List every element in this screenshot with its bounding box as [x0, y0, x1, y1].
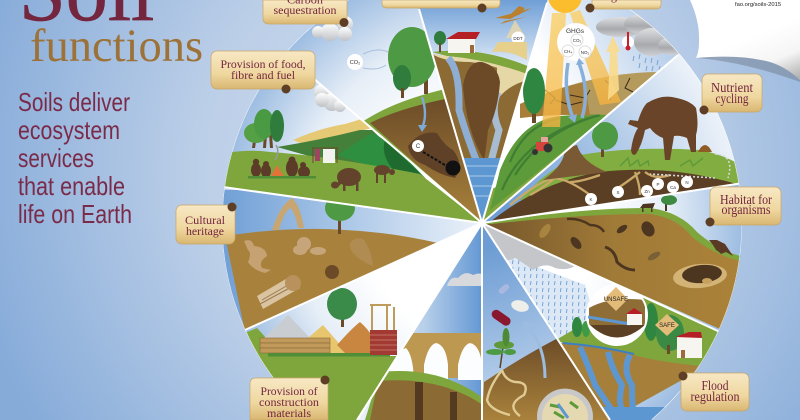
label: Provision of construction materials: Provision of: [260, 384, 318, 398]
label: Cultural heritage: heritage: [186, 224, 224, 238]
icon: upward arrow: [606, 36, 620, 100]
label: Nutrient cycling: cycling: [716, 92, 748, 107]
subtitle text: [18, 87, 132, 229]
aqueduct: [400, 333, 483, 378]
panel: climate regulation: [484, 0, 678, 220]
nutrient circles: N: [685, 180, 689, 185]
icon: exchange arrows: [566, 58, 585, 123]
icon: tree: [523, 68, 545, 123]
pillars: [415, 382, 457, 420]
subtitle text: life on Earth: [18, 199, 132, 229]
icon: CO2: [347, 50, 388, 70]
icon: arrow: [522, 321, 545, 378]
wheel dividers: [223, 3, 743, 420]
icon: pot: [325, 265, 339, 279]
icon: tree: [592, 122, 618, 157]
icon: thermometer: [622, 32, 634, 50]
label: Nutrient cycling: [700, 74, 762, 114]
panel: nutrient cycling: [480, 50, 750, 230]
icon: laundry: [312, 148, 338, 163]
cloud: [447, 273, 483, 286]
icon: grey gravel pile: [264, 315, 310, 338]
label: Climate regulation: [586, 0, 661, 12]
icon: clay pile: [337, 322, 379, 353]
nutrient circles: K: [589, 197, 593, 202]
icon: brick wall: [370, 305, 397, 355]
water veins: [448, 58, 477, 162]
rain: [505, 255, 600, 345]
rain cloud: [482, 223, 580, 270]
aqueduct arches: [390, 343, 482, 380]
label: Provision of food, fibre and fuel: [211, 51, 315, 94]
panel: carbon sequestration: [288, 0, 480, 220]
icon: arrow into soil: [418, 97, 427, 132]
icon: grey clouds: [596, 14, 686, 56]
nutrient circles: P: [656, 182, 660, 187]
green land: [556, 290, 725, 366]
icon: insects and worms: [537, 219, 662, 270]
soil: [370, 98, 482, 223]
panel: construction materials: [240, 220, 490, 420]
green surface: [482, 208, 745, 340]
roots: [487, 370, 526, 416]
nutrient circles: S: [616, 190, 620, 195]
title: Soil functions: functions: [30, 21, 203, 72]
icon: safe house: [655, 314, 702, 358]
label: Provision of food, fibre and fuel: Provision of food,: [220, 57, 306, 71]
label: Provision of construction materials: materials: [267, 406, 311, 420]
label: Flood regulation: Flood: [702, 379, 728, 394]
icon: GHGs circle: [557, 23, 595, 61]
icon: GHGs circle: CO₂: [573, 38, 582, 43]
nutrient circles: Ca: [670, 185, 676, 190]
icon: tree stump: [543, 145, 607, 180]
icon: tree: [325, 195, 355, 234]
grass: [268, 353, 390, 356]
green meadow: [223, 151, 482, 223]
icon: column: [257, 276, 300, 309]
icon: trees: [244, 109, 284, 148]
icon: tree: [327, 288, 357, 327]
panel: cultural heritage: [220, 190, 490, 340]
label: Habitat for organisms: [706, 187, 781, 226]
icon: clouds: [314, 84, 346, 112]
icon: sun: [548, 0, 582, 13]
icon: trees: [572, 303, 684, 354]
green hill: [364, 90, 453, 197]
soil: [482, 170, 745, 225]
green hill: [520, 149, 745, 200]
soil: [556, 340, 735, 420]
icon: tree: [388, 27, 436, 98]
icon: tractor: [532, 137, 552, 155]
icon: cow: [628, 97, 698, 160]
label: Water purification: [382, 0, 500, 12]
icon: statue: [244, 240, 271, 273]
label: Flood regulation: [678, 372, 749, 411]
icon: fox: [709, 240, 733, 256]
soil: [482, 214, 745, 340]
green hill: [432, 51, 530, 75]
icon: dung: [698, 145, 712, 152]
dark green hill: [278, 130, 380, 164]
panel: flood regulation: [480, 220, 740, 420]
panel: medicines and genetic resources: [480, 220, 620, 420]
icon: pills: [490, 283, 530, 327]
label: Carbon sequestration: sequestration: [274, 3, 336, 17]
icon: pottery shards: [293, 237, 326, 255]
panel: foundation for human infrastructure: [350, 220, 485, 420]
icon: DDT: DDT: [513, 36, 523, 41]
soil: [370, 380, 483, 420]
icon: carbon chained: C: [416, 144, 421, 150]
wheat field: [293, 118, 372, 143]
icon: GHGs circle: GHGs: [566, 28, 585, 35]
dark hill patch: [384, 140, 425, 178]
icon: nutrient cycle arrow: [650, 154, 730, 178]
icon: timber: [260, 338, 330, 353]
lower green field: [484, 144, 572, 220]
sun beams: [542, 10, 621, 127]
nutrient circles: [585, 176, 693, 205]
grass: [620, 158, 703, 166]
soil functions wheel: [200, 0, 750, 420]
label: Nutrient cycling: Nutrient: [711, 81, 753, 96]
title: Soil functions: [19, 0, 203, 72]
soil: [482, 338, 612, 420]
soil column: [433, 54, 523, 158]
soil: [225, 229, 438, 332]
label: Provision of construction materials: [250, 376, 330, 420]
subtitle text: that enable: [18, 171, 125, 201]
green field: [490, 112, 612, 210]
icon: arch ruin: [272, 198, 304, 230]
page curl: [690, 0, 800, 82]
icon: CO2: CO₂: [350, 60, 360, 66]
wheel rim: [222, 0, 742, 420]
label: Cultural heritage: [176, 202, 236, 244]
label: Carbon sequestration: [263, 0, 348, 27]
icon: unsafe inset: UNSAFE: [604, 297, 628, 303]
label: Flood regulation: regulation: [690, 390, 740, 405]
panel: habitat for organisms: [480, 170, 750, 340]
panel: food, fibre and fuel: [224, 84, 479, 222]
icon: sheep: [331, 165, 395, 191]
water body: [600, 407, 665, 420]
icon: GHGs circle: NO₂: [581, 50, 590, 55]
bright green hill: [338, 133, 425, 178]
icon: plane: [495, 6, 532, 24]
roots: [510, 172, 670, 205]
dark soil: [463, 62, 500, 160]
subtitle text: Soils deliver: [18, 87, 130, 117]
light sand band: [433, 54, 526, 96]
label: Habitat for organisms: Habitat for: [720, 193, 772, 208]
underground water: [580, 347, 633, 410]
water body: [464, 158, 500, 220]
icon: plant: [486, 328, 516, 368]
icon: sand pile: [308, 325, 350, 356]
cracked soil: [520, 72, 660, 118]
label: Provision of food, fibre and fuel: fibre and fuel: [231, 68, 296, 82]
panel: water purification and contaminant reduction: [418, 0, 548, 220]
icon: mole burrow: [672, 262, 728, 290]
label: Cultural heritage: Cultural: [185, 213, 226, 227]
icon: DDT: [506, 20, 526, 42]
label: Habitat for organisms: organisms: [722, 203, 770, 218]
source url: fao.org/soils-2015: [735, 2, 781, 8]
subtitle text: ecosystem: [18, 115, 120, 145]
icon: horse and tree: [640, 195, 677, 212]
icon: safe house: SAFE: [659, 323, 675, 329]
icon: petri dish: [537, 389, 593, 420]
subtitle text: services: [18, 143, 94, 173]
icon: unsafe inset: [587, 285, 647, 345]
green ground: [245, 328, 400, 420]
icon: clouds: [312, 16, 353, 41]
icon: amphora: [350, 238, 373, 266]
wheat: [492, 42, 527, 60]
green ground: [365, 371, 483, 420]
icon: carbon chained: [408, 133, 460, 178]
label: Provision of construction materials: construction: [259, 395, 319, 409]
water band: [563, 343, 634, 354]
icon: house: [434, 31, 480, 53]
rain: [633, 54, 660, 71]
icon: people and campfire: [248, 145, 316, 178]
icon: GHGs circle: CH₄: [564, 49, 572, 54]
nutrient circles: Zn: [644, 189, 650, 194]
